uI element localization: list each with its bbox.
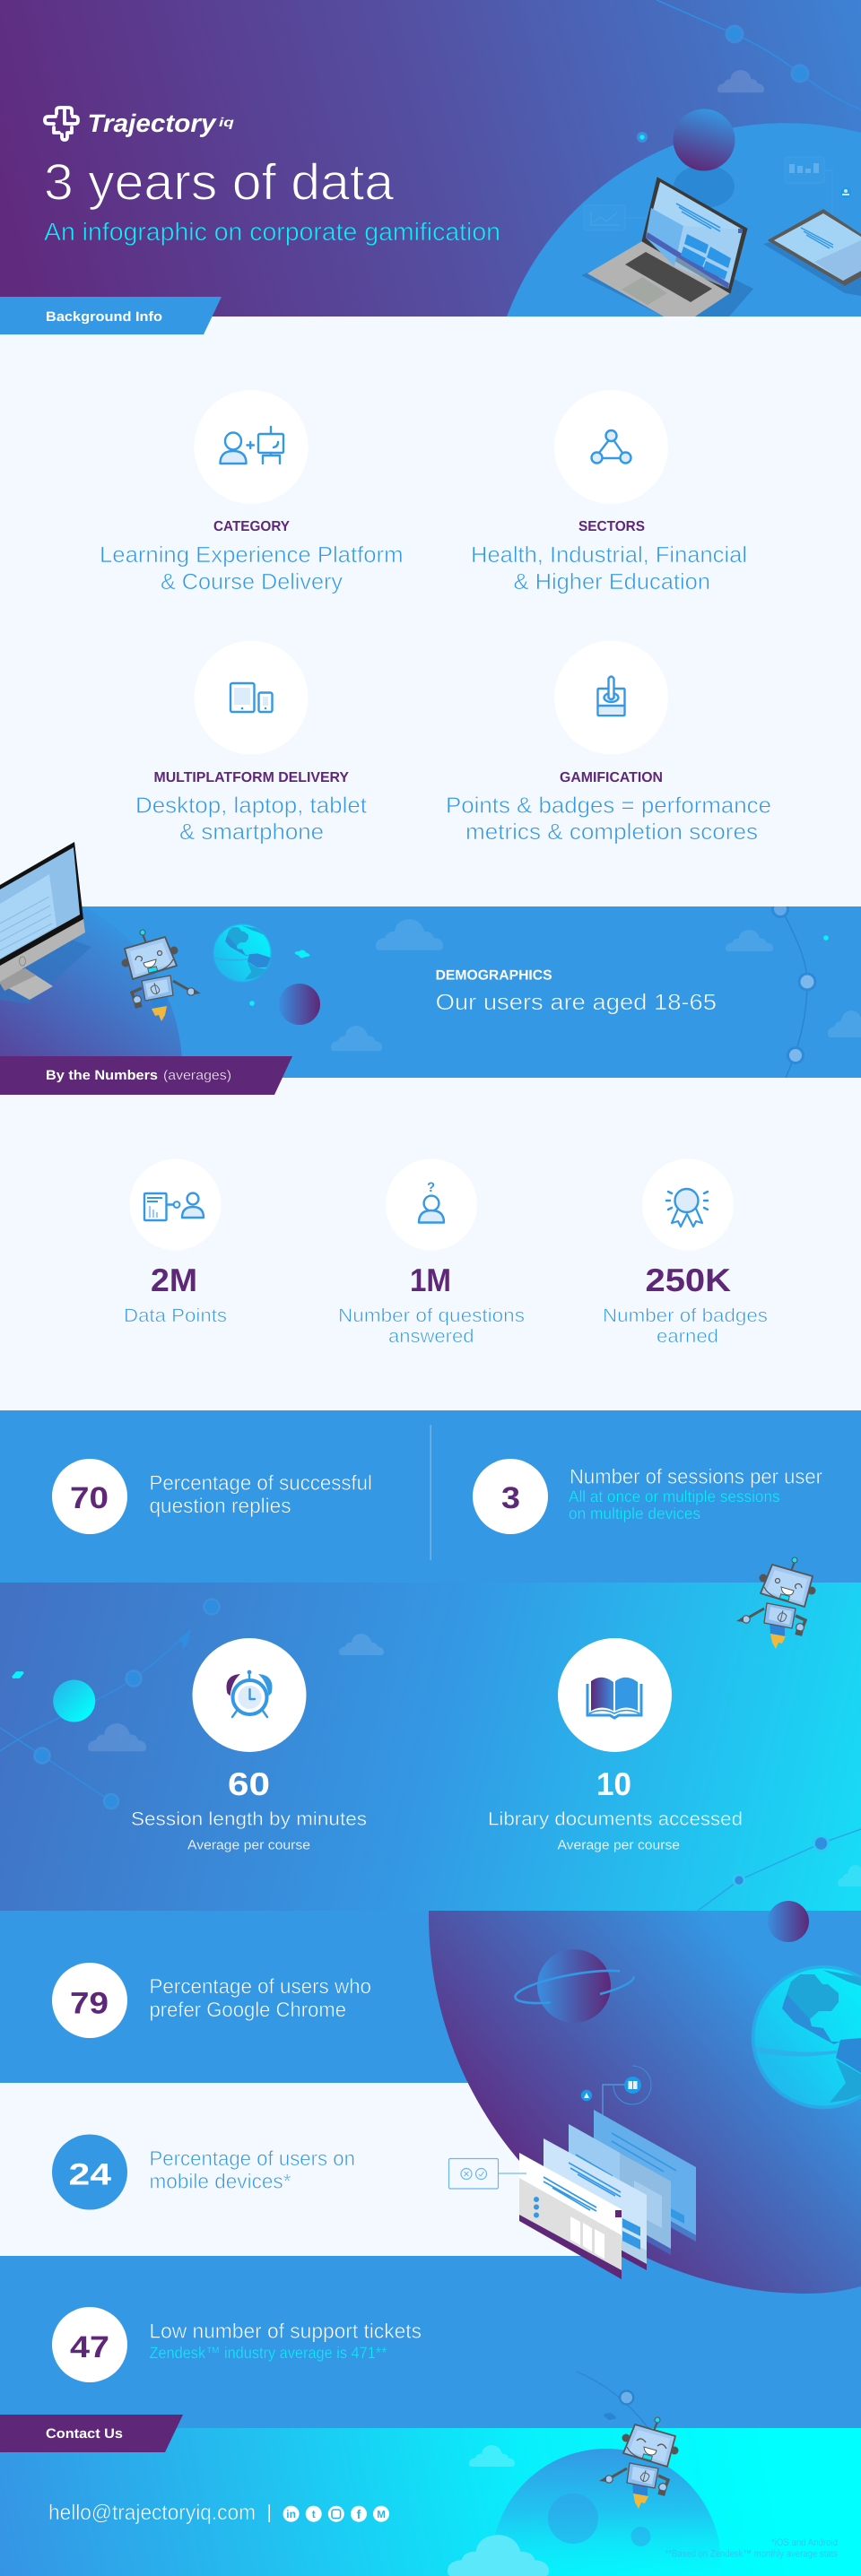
panel: browser stat band	[0, 1911, 861, 2083]
cyan dot	[823, 935, 829, 941]
section tab: contact us	[0, 2415, 183, 2452]
stat: 79	[52, 1963, 371, 2038]
item: category	[100, 390, 404, 594]
social icons	[283, 2506, 389, 2522]
stat: questions answered: answered	[388, 1326, 474, 1347]
heading: GAMIFICATION	[560, 770, 663, 785]
section tab: by the numbers: (averages)	[163, 1068, 231, 1083]
stat: data points: 2M	[151, 1262, 197, 1298]
cloud	[448, 2535, 549, 2576]
icon: ribbon badge	[666, 1189, 708, 1227]
icon: joystick	[597, 676, 624, 716]
clouds	[331, 919, 861, 1051]
panel: header	[0, 0, 861, 317]
earth	[752, 1965, 861, 2109]
stat: 24: 24	[68, 2157, 111, 2191]
stat: 60 minutes: Average per course	[187, 1838, 310, 1852]
cloud	[718, 70, 764, 92]
stat: 70: 70	[70, 1481, 109, 1515]
stat: 47: Zendesk™ industry average is 471**	[149, 2344, 387, 2362]
section tab: contact us: Contact Us	[46, 2426, 123, 2442]
illustration: desktop monitor	[0, 842, 91, 1004]
panel: gradient session stats	[0, 1583, 861, 1912]
stat: 70	[52, 1459, 372, 1534]
icon: network triangle	[592, 430, 631, 463]
dome planet	[491, 2449, 721, 2576]
floating sphere	[673, 109, 735, 170]
small ringed planet	[294, 950, 310, 958]
stat: badges earned: Number of badges	[603, 1305, 768, 1326]
stat: 3: Number of sessions per user	[570, 1465, 822, 1488]
description	[100, 542, 404, 594]
icon: document to person	[144, 1193, 204, 1220]
third screen	[569, 2124, 671, 2255]
stat: 79: prefer Google Chrome	[149, 1998, 346, 2021]
cloud	[469, 2445, 515, 2467]
stat: 10 documents: Average per course	[558, 1838, 680, 1852]
illustration: tablet	[763, 210, 861, 296]
heading: MULTIPLATFORM DELIVERY	[154, 770, 349, 785]
gradient planet corner	[0, 906, 182, 1078]
small purple planet	[768, 1901, 809, 1942]
stat: badges earned	[603, 1158, 768, 1347]
heading: DEMOGRAPHICS	[436, 968, 552, 983]
item: gamification	[446, 640, 771, 845]
panel: demographics	[0, 902, 861, 1078]
stat: 3: on multiple devices	[569, 1505, 700, 1522]
illustration: laptop	[581, 178, 753, 317]
icon: person with question: ?	[427, 1180, 435, 1195]
description: & Higher Education	[513, 569, 710, 594]
subtitle: An infographic on corporate gamification	[44, 218, 500, 246]
robot pointing left	[736, 1557, 816, 1649]
clouds	[88, 1634, 861, 1886]
panel: footer	[0, 2428, 861, 2576]
section tab: by the numbers	[0, 1056, 292, 1095]
small ringed planet	[11, 1670, 25, 1680]
dome	[507, 123, 861, 317]
logo: iq	[219, 115, 235, 129]
description: Our users are aged 18-65	[436, 990, 717, 1015]
stat: 60 minutes	[131, 1638, 367, 1852]
ringed planet	[513, 1949, 636, 2023]
stat: questions answered: Number of questions	[338, 1305, 525, 1326]
orbit line with nodes	[657, 0, 861, 109]
robot	[122, 930, 201, 1021]
logo wordmark: Trajectory	[88, 109, 217, 137]
stat: questions answered: 1M	[410, 1262, 451, 1298]
logo	[45, 108, 235, 140]
crater spots	[548, 2494, 651, 2546]
orbit line with nodes	[773, 902, 815, 1078]
stat: 47: 47	[70, 2330, 109, 2364]
dim ringed planet	[603, 2412, 617, 2421]
icon: alarm clock	[227, 1670, 272, 1717]
social icons: f	[357, 2507, 361, 2521]
panel: sessions band	[0, 1410, 861, 1583]
stat: 70: question replies	[149, 1494, 291, 1517]
description: & smartphone	[179, 820, 324, 845]
footnotes: *iOS and Android	[771, 2537, 838, 2548]
description: Desktop, laptop, tablet	[135, 793, 367, 818]
icon: person plus robot	[221, 427, 283, 464]
earth	[213, 924, 272, 983]
social icons: M	[377, 2510, 386, 2520]
front screen	[519, 2153, 622, 2279]
stat: 60 minutes: Session length by minutes	[131, 1809, 367, 1829]
section tab: background info	[0, 297, 222, 334]
social icons: in	[286, 2508, 296, 2520]
icon: tablet and phone	[230, 683, 273, 712]
heading: SECTORS	[578, 519, 645, 534]
panel: support stat band	[0, 2256, 861, 2428]
description	[471, 542, 747, 594]
description: Learning Experience Platform	[100, 542, 404, 568]
stat: data points: Data Points	[124, 1305, 227, 1326]
purple planet	[279, 984, 320, 1025]
stat: 79: Percentage of users who	[149, 1974, 371, 1998]
icon: person with question	[419, 1180, 444, 1223]
robot waving	[599, 2417, 678, 2509]
ghost chart cards	[584, 157, 832, 230]
icon: person badge	[840, 187, 851, 198]
item: sectors	[471, 390, 747, 594]
logo mark	[45, 108, 78, 140]
description: Points & badges = performance	[446, 793, 771, 818]
description	[446, 793, 771, 845]
cyan dot	[249, 1001, 255, 1006]
stat: 3: 3	[501, 1481, 520, 1515]
stat: 10 documents	[488, 1638, 743, 1852]
panel: mobile stat band	[0, 2083, 861, 2256]
email: hello@trajectoryiq.com	[48, 2501, 256, 2525]
floating sphere shadow	[674, 165, 735, 208]
stat: badges earned: 250K	[646, 1262, 731, 1298]
orbit lines	[0, 1634, 861, 1911]
second screen	[544, 2138, 647, 2270]
back screen	[594, 2110, 696, 2242]
section tab: by the numbers: By the Numbers	[46, 1068, 158, 1083]
section tab: background info: Background Info	[46, 309, 162, 325]
stat: data points	[124, 1158, 227, 1326]
description: & Course Delivery	[161, 569, 344, 594]
icon circle	[554, 640, 668, 755]
orbit line with node	[577, 2372, 648, 2428]
panel: by the numbers stats	[124, 1158, 768, 1347]
icon circle	[194, 390, 309, 504]
description: Health, Industrial, Financial	[471, 542, 747, 568]
stat: 3: All at once or multiple sessions	[569, 1487, 780, 1505]
footnotes	[665, 2537, 838, 2559]
stat: 70: Percentage of successful	[149, 1470, 372, 1494]
stat: 47: Low number of support tickets	[149, 2319, 422, 2342]
stat: 24	[52, 2134, 355, 2209]
heading: CATEGORY	[213, 519, 290, 534]
panel: background info	[0, 317, 861, 906]
stat: 60 minutes: 60	[228, 1765, 270, 1802]
orbit nodes	[34, 1600, 829, 1886]
footnotes: **Based on Zendesk™ monthly average stats	[665, 2548, 838, 2559]
cyan dot	[637, 132, 648, 143]
stacked course screens	[448, 2110, 696, 2279]
answer box	[448, 2159, 526, 2189]
moon	[53, 1680, 95, 1722]
stat: 10 documents: Library documents accessed	[488, 1809, 743, 1829]
connector icons	[581, 2066, 651, 2134]
stat: 3	[473, 1459, 822, 1534]
stat: 10 documents: 10	[596, 1765, 631, 1802]
rocket	[177, 1628, 191, 1650]
description: metrics & completion scores	[465, 820, 758, 845]
stat: 24: mobile devices*	[149, 2170, 291, 2193]
description	[135, 793, 367, 845]
icon: open book	[587, 1678, 641, 1718]
stat: 79: 79	[70, 1987, 109, 2021]
icon circle	[194, 640, 309, 755]
title: 3 years of data	[44, 154, 394, 212]
icon circle	[554, 390, 668, 504]
item: multiplatform delivery	[135, 640, 367, 845]
stat: questions answered	[338, 1158, 525, 1347]
stat: 47	[52, 2307, 422, 2382]
big purple planet arc	[429, 1901, 861, 2294]
social icons: t	[312, 2508, 316, 2520]
stat: 24: Percentage of users on	[149, 2147, 355, 2170]
stat: badges earned: earned	[657, 1326, 718, 1347]
